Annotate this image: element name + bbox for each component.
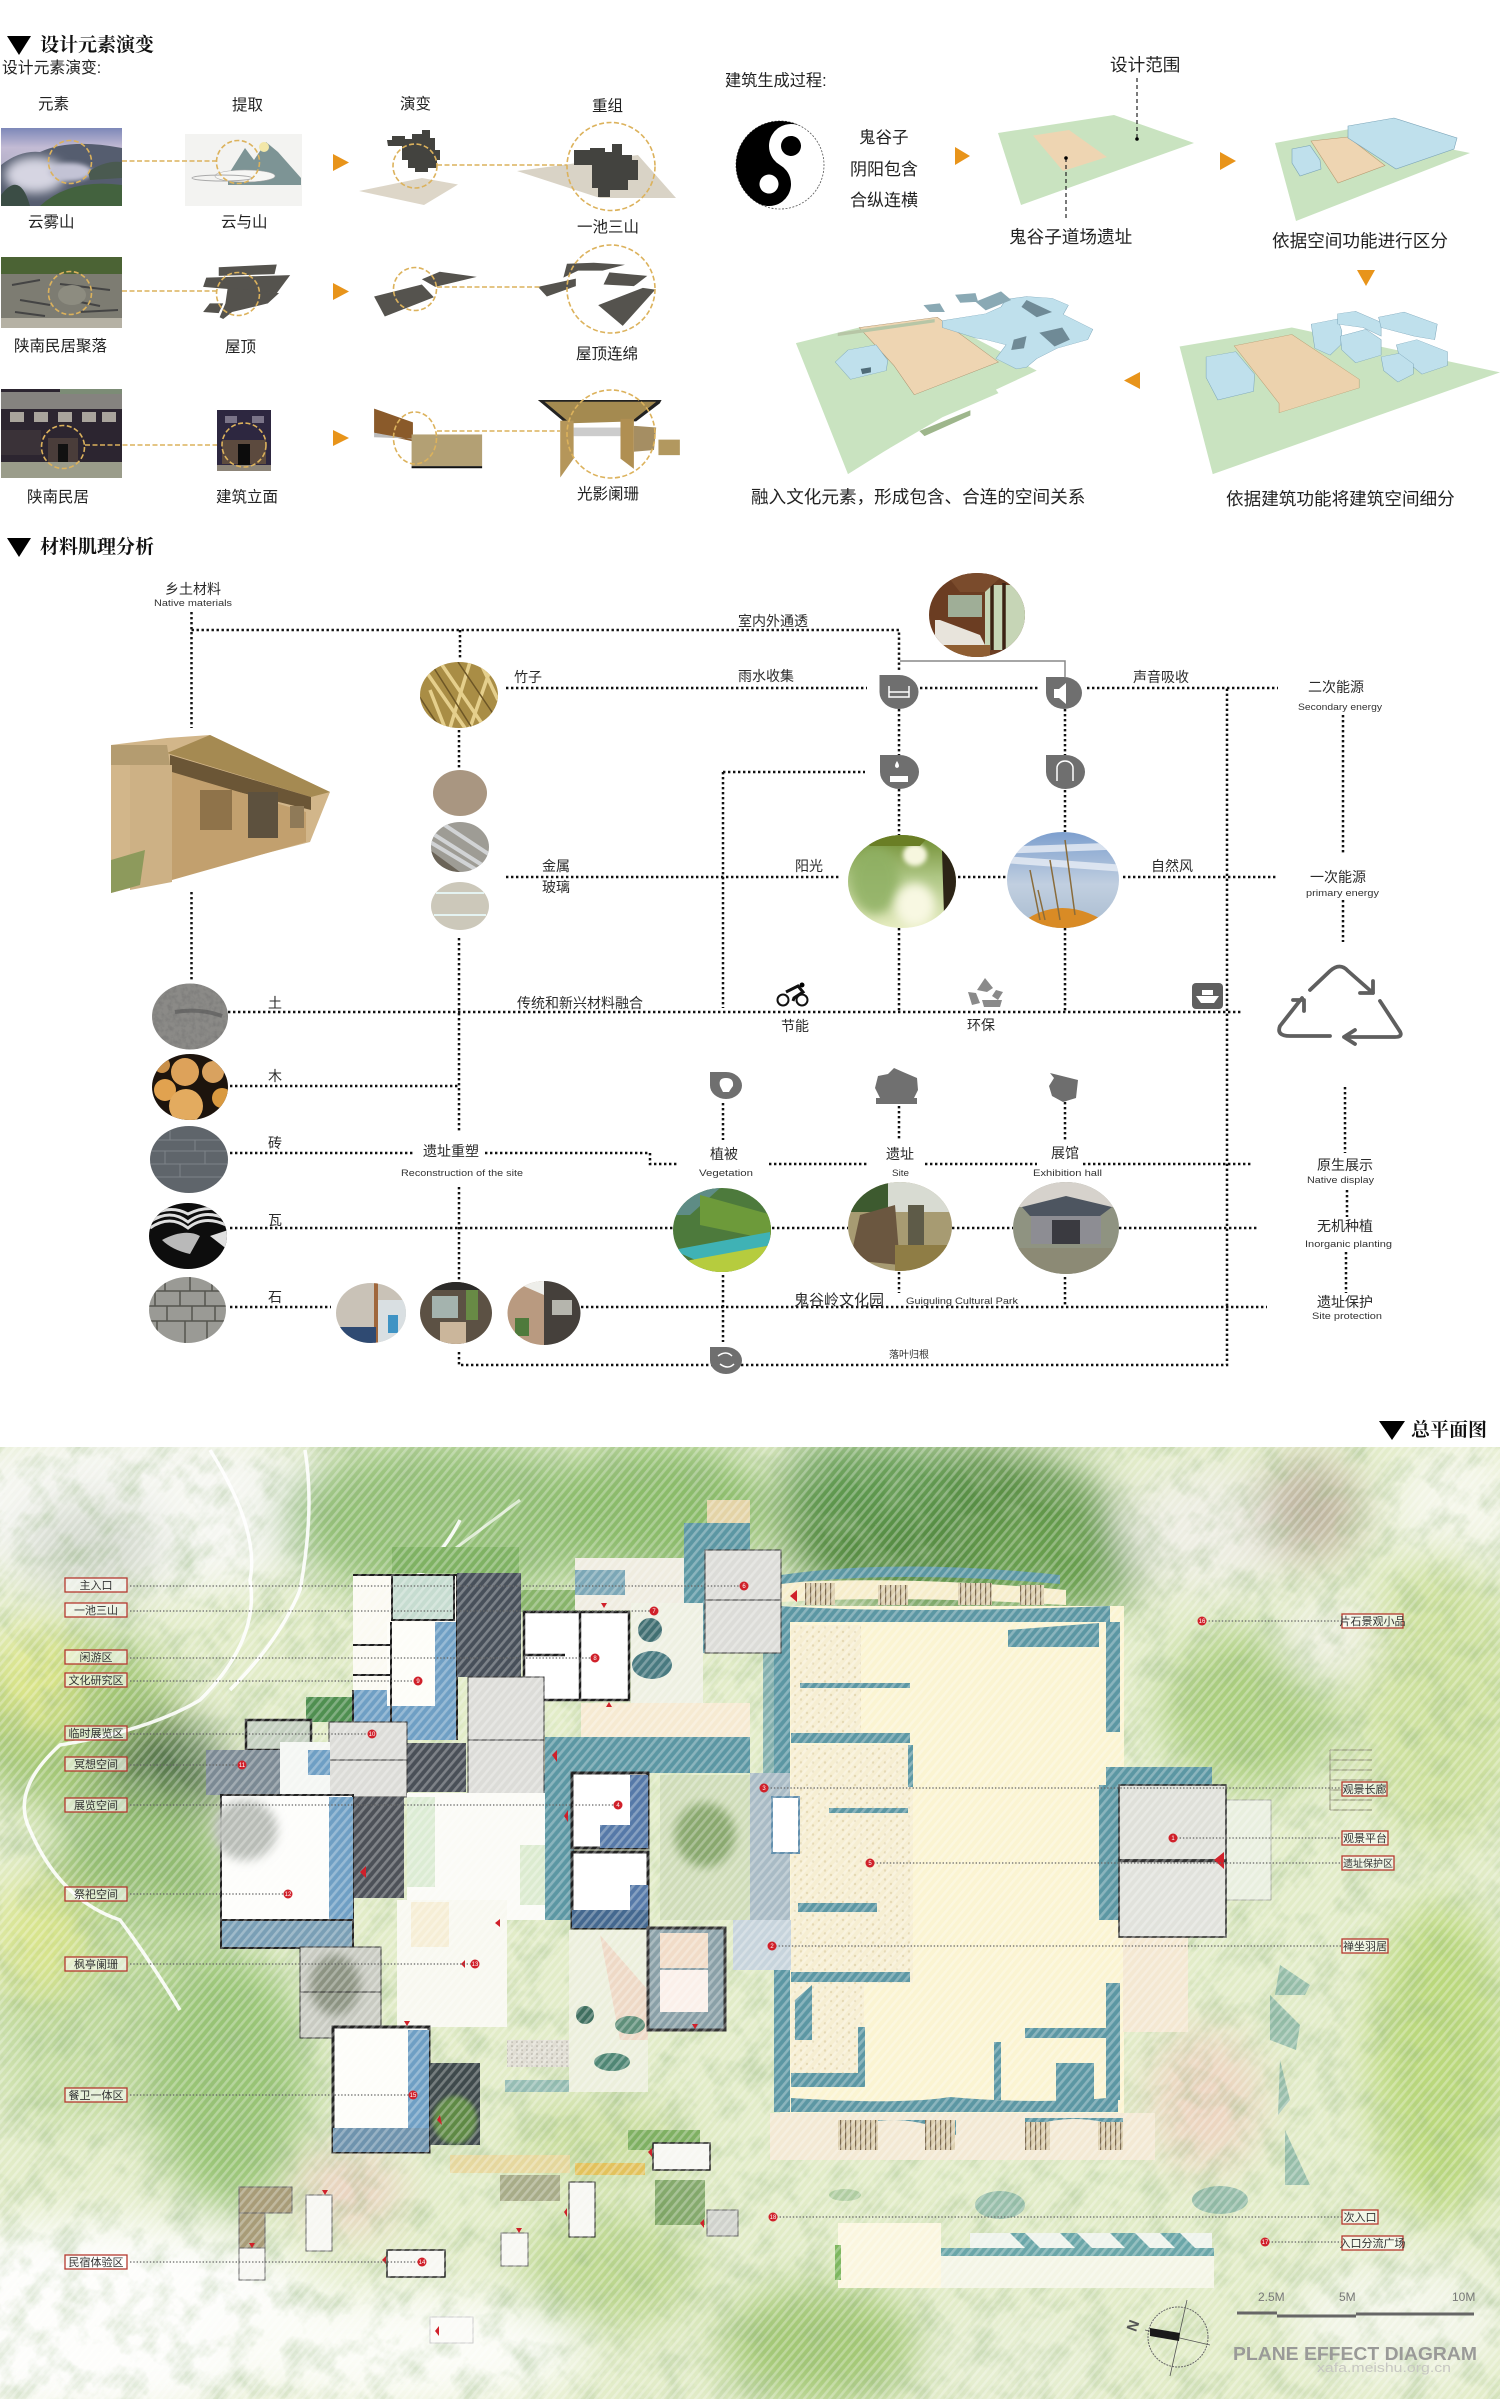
labels: top flows: 雨水收集: [738, 668, 794, 684]
circle: stone: [149, 1277, 227, 1343]
model: continuous roofs: [538, 263, 655, 326]
plan: numbered markers: 16: [1199, 1619, 1206, 1625]
plan: numbered markers: 7: [652, 1609, 656, 1615]
labels row 3: 建筑立面: [216, 488, 278, 506]
node: exhibition hall: 展馆: [1051, 1145, 1079, 1161]
text: fusion of materials: 传统和新兴材料融合: [517, 995, 643, 1011]
node: native materials: 乡土材料: [165, 581, 221, 597]
diagram: functional zones: [1275, 118, 1470, 221]
node: site protection: [1312, 1294, 1382, 1321]
node: inorganic planting: Inorganic planting: [1305, 1239, 1392, 1249]
plan: numbered markers: [238, 1582, 1270, 2266]
model: rock massing with ground plane: [359, 130, 458, 205]
callout: dojo ruins: [1009, 156, 1132, 247]
node: exhibition hall: [1033, 1145, 1102, 1178]
labels: materials: [268, 995, 282, 1305]
node: native display: 原生展示: [1317, 1157, 1373, 1173]
node: site reconstruction: [401, 1143, 523, 1178]
photo: stone ruins: [848, 1182, 952, 1271]
plan: scale bar: [1237, 2290, 1475, 2316]
labels: materials: 石: [268, 1289, 282, 1305]
photo: bedroom: [336, 1283, 406, 1343]
plan: numbered markers: 15: [410, 2093, 417, 2099]
bracket line: [900, 661, 1065, 677]
node: site: [886, 1146, 914, 1178]
icon: exhibition hall: [1049, 1073, 1078, 1102]
plan: left zone labels: 展览空间: [74, 1798, 118, 1812]
plan: numbered markers: 6: [742, 1584, 746, 1590]
icon: ship: [1192, 983, 1223, 1009]
node: site reconstruction: 遗址重塑: [423, 1143, 479, 1159]
plan: left zone labels: 祭祀空间: [74, 1887, 118, 1901]
node: inorganic planting: 无机种植: [1317, 1218, 1373, 1234]
plan: central ruins courtyard: [770, 1580, 1271, 2160]
labels row 2: 屋顶连绵: [576, 345, 638, 363]
plan: right zone labels: 片石景观小品: [1340, 1615, 1406, 1628]
labels: materials: 木: [268, 1068, 282, 1084]
subtitle: 设计元素演变:: [2, 59, 101, 77]
arrow: row 1: [333, 154, 349, 171]
label: metal and glass: [542, 858, 570, 895]
plan: numbered markers: 3: [762, 1786, 766, 1792]
plan: small guest houses: [239, 2143, 738, 2343]
circle: brick: [149, 1126, 229, 1193]
plan: numbered markers: 11: [239, 1763, 246, 1769]
labels row 1: 一池三山: [577, 218, 639, 236]
panel: building generation process: [720, 55, 1500, 509]
callout: design scope: 设计范围: [1110, 55, 1180, 75]
photo: indoor outdoor corridor: [929, 573, 1025, 657]
node: vegetation: [699, 1146, 753, 1178]
plan: title watermark: PLANE EFFECT DIAGRAM: [1233, 2344, 1477, 2364]
labels: top flows: 室内外通透: [738, 613, 808, 629]
photo: wheat and sky: [1007, 832, 1119, 928]
diagram: integrated massing: [796, 291, 1093, 474]
plan: numbered markers: 5: [868, 1861, 872, 1867]
plan: numbered markers: 18: [770, 2215, 777, 2221]
node: vegetation: 植被: [710, 1146, 738, 1162]
photo: rammed earth house: [111, 735, 330, 893]
arrow: row 3: [333, 430, 349, 446]
caption: integrate culture: 融入文化元素，形成包含、合连的空间关系: [751, 487, 1085, 507]
plan: right zone labels: [1340, 1614, 1406, 2250]
plan: numbered markers: 8: [593, 1656, 597, 1662]
plan: numbered markers: 10: [369, 1732, 376, 1738]
plan: left zone labels: 文化研究区: [68, 1673, 124, 1687]
icon: wind swirl: [710, 1347, 742, 1374]
labels row 2: 陕南民居聚落: [14, 337, 108, 355]
labels row 3: 陕南民居: [27, 488, 89, 506]
plan: left zone labels: 民宿体验区: [68, 2255, 124, 2269]
circle: tile: [149, 1203, 228, 1269]
circle: bamboo: [415, 662, 498, 728]
diagram: detailed volumes: [1180, 311, 1500, 474]
plan: right zone labels: 次入口: [1344, 2210, 1376, 2224]
text: guiguling cultural park: Guiguling Cultural Park: [906, 1296, 1019, 1306]
labels row 1: 云雾山: [28, 213, 75, 231]
plan: left zone labels: 临时展览区: [68, 1726, 124, 1740]
node: native materials: Native materials: [154, 598, 233, 608]
circle: earth: [152, 984, 228, 1050]
caption: functional zones: 依据空间功能进行区分: [1272, 231, 1448, 251]
image: building facade: [217, 410, 271, 471]
text: guiguling cultural park: 鬼谷岭文化园: [794, 1292, 884, 1309]
icon: sound absorption: [1046, 677, 1082, 709]
icon: arch: [1046, 755, 1085, 789]
node: exhibition hall: Exhibition hall: [1033, 1168, 1102, 1178]
plan: right zone labels: 遗址保护区: [1343, 1857, 1393, 1870]
photo: misty mountains: [1, 128, 122, 206]
circle: wood: [150, 1054, 232, 1123]
node: secondary energy: 二次能源: [1308, 679, 1364, 695]
panel: material texture analysis: [7, 535, 1401, 1374]
model: light and shadow gate: [538, 400, 680, 478]
plan: title watermark: xafa.meishu.org.cn: [1317, 2360, 1451, 2375]
plan: scale bar: 10M: [1452, 2290, 1475, 2304]
heading: master plan: [1379, 1419, 1487, 1441]
labels row 2: [14, 337, 638, 363]
column headers: 元素: [38, 95, 69, 113]
plan: left zone labels: 一池三山: [74, 1604, 118, 1617]
plan: left zone labels: [65, 1578, 127, 2269]
circle: wood panel: [433, 770, 487, 816]
plan: compass: N: [1124, 2318, 1143, 2334]
plan: compass: [1124, 2300, 1210, 2376]
labels: top flows: 声音吸收: [1133, 669, 1189, 685]
text: guiguzi concepts: 鬼谷子: [859, 128, 908, 147]
photo: exhibition hall: [1013, 1182, 1119, 1275]
plan: cream entry plaza: [835, 2223, 1214, 2288]
circle: glass: [430, 882, 490, 932]
arrow: row 2: [333, 283, 349, 300]
plan: central garden buildings: [450, 1500, 799, 2175]
plan: numbered markers: 14: [419, 2260, 426, 2266]
plan: teal edging and walls: [536, 1523, 1212, 2135]
text: guiguzi concepts: 阴阳包含: [850, 160, 918, 179]
node: native display: Native display: [1307, 1175, 1375, 1185]
labels: energy saving and environment: 环保: [967, 1017, 995, 1033]
diagram: site plane: [998, 115, 1194, 205]
labels row 2: 屋顶: [225, 338, 256, 356]
node: site: 遗址: [886, 1146, 914, 1162]
arrow: step 3: [1357, 270, 1375, 286]
plan: red section arrows: [249, 1590, 1224, 2336]
icon: site tree: [875, 1068, 918, 1104]
labels: top flows: 自然风: [1151, 858, 1193, 874]
photo: green valley: [673, 1188, 772, 1273]
icon: cycling: [778, 982, 808, 1006]
icon: vegetation: [710, 1072, 742, 1099]
plan: right zone labels: 入口分流广场: [1340, 2236, 1406, 2250]
node: primary energy: primary energy: [1306, 888, 1380, 898]
arrow: step 2: [1220, 152, 1236, 170]
plan: trees and vegetation right: [829, 1965, 1310, 2219]
icon: rain collection: [880, 675, 918, 709]
plan: main observation pavilion: [1119, 1785, 1226, 1937]
label: metal and glass: 金属: [542, 858, 570, 874]
labels row 1: [28, 213, 639, 236]
plan: stairs and decks: [805, 1583, 1372, 2150]
arrow: step 4: [1124, 372, 1140, 389]
panel: design element evolution: [1, 33, 680, 506]
model: roof fragments: [203, 264, 290, 319]
plan: numbered markers: 12: [285, 1892, 292, 1898]
plan: annotation leaders: [130, 1586, 1342, 2262]
node: secondary energy: [1298, 679, 1383, 712]
icon: recycling: [968, 978, 1003, 1007]
image: cloud and mountain painting: [185, 134, 302, 206]
plan: left zone labels: 餐卫一体区: [68, 2088, 124, 2102]
photo: Shaannan village: [1, 257, 122, 328]
model: wooden facade: [374, 409, 482, 468]
node: secondary energy: Secondary energy: [1298, 702, 1383, 712]
text: guiguling cultural park: [794, 1292, 1019, 1309]
plan: numbered markers: 2: [770, 1944, 774, 1950]
plan: scale bar: 2.5M: [1258, 2290, 1285, 2304]
node: vegetation: Vegetation: [699, 1168, 753, 1178]
column headers: 提取: [232, 96, 263, 114]
heading: material texture analysis: 材料肌理分析: [40, 535, 154, 558]
icon: recycle cycle: [1279, 966, 1401, 1044]
plan: numbered markers: 13: [472, 1962, 479, 1968]
icon: yin yang: [720, 105, 840, 225]
label: bamboo: 竹子: [514, 669, 542, 685]
column headers: 演变: [400, 95, 431, 113]
node: primary energy: 一次能源: [1310, 869, 1366, 885]
arrow: step 1: [955, 147, 970, 165]
heading: building generation: 建筑生成过程:: [725, 72, 827, 90]
circle: metal: [430, 822, 490, 872]
labels row 3: 光影阑珊: [577, 485, 639, 503]
labels: energy saving and environment: 节能: [781, 1018, 809, 1034]
plan: left zone labels: 冥想空间: [74, 1757, 118, 1771]
photo: forest sunlight: [848, 835, 956, 928]
labels: materials: 瓦: [268, 1212, 282, 1228]
plan: garden buildings left cluster: [206, 1547, 629, 2152]
node: site: Site: [892, 1168, 909, 1178]
plan: scale bar: 5M: [1339, 2290, 1356, 2304]
node: native display: [1307, 1157, 1375, 1185]
plan: right zone labels: 观景平台: [1343, 1831, 1387, 1845]
plan: numbered markers: 1: [1171, 1836, 1175, 1842]
plan: title watermark: [1233, 2344, 1477, 2375]
node: site protection: Site protection: [1312, 1311, 1382, 1321]
plan: diagonal hatch overlay: [0, 1447, 1500, 2399]
plan: numbered markers: 17: [1262, 2240, 1269, 2246]
text: falling leaves return: 落叶归根: [889, 1348, 929, 1361]
heading: design element evolution: 设计元素演变: [40, 33, 155, 56]
photo: lounge: [420, 1282, 492, 1344]
labels: materials: 砖: [268, 1135, 282, 1151]
element: dashed evolution circles row 3: [42, 390, 655, 478]
text: guiguzi concepts: [850, 128, 918, 210]
column headers: 重组: [592, 97, 623, 115]
callout: design scope: [1110, 55, 1180, 141]
node: site reconstruction: Reconstruction of the site: [401, 1168, 523, 1178]
plan: numbered markers: 9: [416, 1679, 420, 1685]
labels: top flows: 阳光: [795, 858, 823, 874]
node: site protection: 遗址保护: [1317, 1294, 1373, 1310]
element: dashed evolution circles row 2: [48, 245, 655, 333]
connector network: [192, 612, 1347, 1365]
label: metal and glass: 玻璃: [542, 879, 570, 895]
plan: right zone labels: 观景长廊: [1342, 1782, 1386, 1796]
caption: subdivide spaces: 依据建筑功能将建筑空间细分: [1226, 489, 1455, 509]
plan: right zone labels: 禅坐羽居: [1343, 1939, 1387, 1953]
node: primary energy: [1306, 869, 1380, 898]
plan: watercolor landscape: [0, 1425, 1500, 2399]
plan: left zone labels: 枫亭阑珊: [74, 1957, 118, 1971]
text: guiguzi concepts: 合纵连横: [850, 191, 918, 210]
labels row 3: [27, 485, 639, 506]
callout: dojo ruins: 鬼谷子道场遗址: [1009, 227, 1132, 247]
model: one pond three mountains: [517, 144, 676, 198]
node: inorganic planting: [1305, 1218, 1392, 1249]
element: dashed evolution circles row 1: [48, 122, 655, 210]
plan: left zone labels: 主入口: [80, 1579, 112, 1592]
photo: Shaannan house: [1, 389, 122, 478]
labels: energy saving and environment: [781, 1017, 995, 1034]
heading: master plan: 总平面图: [1411, 1419, 1487, 1441]
labels row 1: 云与山: [221, 213, 268, 231]
plan: left zone labels: 闲游区: [80, 1650, 112, 1664]
photo: exhibition room: [507, 1281, 581, 1345]
node: native materials: [154, 581, 233, 608]
model: roof evolution: [374, 272, 477, 317]
labels: materials: 土: [268, 995, 282, 1011]
panel: master plan: [0, 1425, 1500, 2399]
icon: water drop: [880, 755, 919, 789]
column headers: [38, 95, 623, 115]
plan: numbered markers: 4: [616, 1803, 620, 1809]
labels: top flows: [738, 613, 1193, 874]
